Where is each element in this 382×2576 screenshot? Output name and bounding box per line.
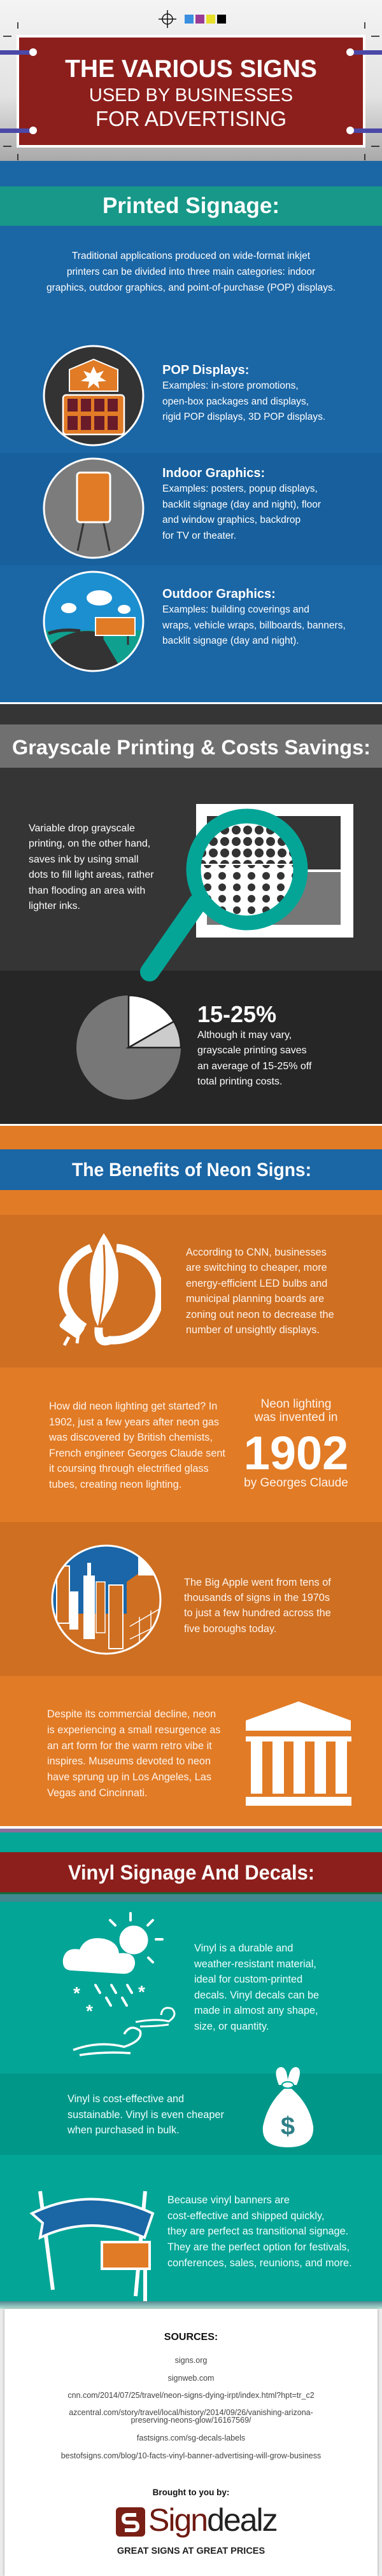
text: CNN: zoning out neon to decrease the — [186, 1309, 334, 1320]
text: big apple: five boroughs today. — [184, 1623, 276, 1635]
text: resurgence: an art form for the warm retro vibe it — [47, 1740, 212, 1752]
panel: sources: fastsigns.com/sg-decals-labels — [137, 2434, 245, 2442]
text: indoor graphics: Indoor Graphics: — [162, 466, 265, 480]
text: CNN: number of unsightly displays. — [186, 1324, 320, 1336]
panel: sources — [4, 2309, 378, 2576]
stat: 15-25%: an average of 15-25% off — [197, 1061, 311, 1072]
text: history: 1902, just a few years after neon gas — [49, 1416, 219, 1428]
text: cost-effective: when purchased in bulk. — [67, 2124, 180, 2136]
stat: 15-25%: grayscale printing saves — [197, 1045, 307, 1056]
text: resurgence: inspires. Museums devoted to neon — [47, 1755, 211, 1767]
text: indoor graphics: Examples: posters, popup displays, — [162, 483, 318, 494]
panel: neon — [0, 1124, 382, 1826]
text: variable drop: lighter inks. — [29, 901, 80, 911]
heading: vinyl — [0, 1852, 382, 1894]
text: POP displays: POP Displays: — [162, 363, 249, 377]
panel: sources: signweb.com — [168, 2374, 214, 2383]
panel: sources: azcentral.com/story/travel/local/history/2014/09/26/vanishing-arizona- — [69, 2408, 313, 2417]
text: history — [49, 1401, 225, 1490]
text: durable — [194, 1942, 319, 2032]
text: banners: They are the perfect option for festivals, — [167, 2241, 350, 2253]
text: banners — [167, 2194, 352, 2269]
text: banners: conferences, sales, reunions, and more. — [167, 2257, 352, 2269]
icon: banner arch — [29, 2191, 154, 2301]
print marks — [3, 10, 379, 160]
pie chart — [76, 995, 181, 1100]
text: cost-effective: Vinyl is cost-effective and — [67, 2093, 184, 2105]
icon: money bag — [262, 2067, 313, 2147]
text: durable: Vinyl is a durable and — [194, 1942, 293, 1954]
text: resurgence: is experiencing a small resurgence as — [47, 1724, 220, 1736]
text: outdoor graphics: Examples: building coverings and — [162, 604, 309, 615]
header background — [0, 0, 382, 161]
panel: sources: preserving-neons-glow/16167569/ — [131, 2416, 251, 2425]
icon: indoor graphics — [43, 458, 144, 558]
text: history: How did neon lighting get started? In — [49, 1401, 217, 1412]
stat: 15-25% — [197, 1001, 312, 1087]
text: CNN: are switching to cheaper, more — [186, 1262, 327, 1273]
text: variable drop — [29, 823, 154, 911]
text: history: French engineer Georges Claude sent — [49, 1448, 225, 1459]
title banner: FOR ADVERTISING — [96, 107, 286, 130]
panel: sources: bestofsigns.com/blog/10-facts-vinyl-banner-advertising-will-grow-business — [61, 2451, 321, 2460]
text: durable: made in almost any shape, — [194, 2005, 318, 2016]
divider — [0, 2301, 382, 2309]
heading: vinyl: Vinyl Signage And Decals: — [68, 1861, 315, 1884]
text: durable: weather-resistant material, — [194, 1958, 316, 1970]
brought to you by: Brought to you by: — [153, 2488, 229, 2497]
panel: sources: cnn.com/2014/07/25/travel/neon-signs-dying-irpt/index.html?hpt=tr_c2 — [67, 2391, 315, 2400]
text: cost-effective: sustainable. Vinyl is even cheaper — [67, 2109, 224, 2121]
text: indoor graphics: backlit signage (day and night), floor — [162, 499, 321, 510]
text: big apple — [184, 1577, 331, 1635]
text: POP displays: Examples: in-store promotions, — [162, 380, 299, 391]
icon: weather — [62, 1912, 176, 2056]
text: CNN — [186, 1247, 334, 1336]
text: CNN: According to CNN, businesses — [186, 1247, 327, 1258]
stat: 1902: was invented in — [255, 1411, 337, 1424]
heading: printed signage: Printed Signage: — [103, 193, 279, 218]
intro text: printers can be divided into three main categories: indoor — [67, 267, 315, 277]
title banner: USED BY BUSINESSES — [89, 85, 293, 106]
text: big apple: The Big Apple went from tens of — [184, 1577, 331, 1588]
text: indoor graphics: for TV or theater. — [162, 530, 236, 541]
intro text — [46, 251, 336, 293]
text: history: it coursing through electrified glass — [49, 1463, 209, 1474]
heading: grayscale: Grayscale Printing & Costs Savings: — [12, 736, 371, 759]
icon: money bag: $ — [281, 2112, 295, 2140]
divider stripes — [0, 1826, 382, 1832]
text: outdoor graphics: backlit signage (day and night). — [162, 635, 299, 646]
text: big apple: thousands of signs in the 1970s — [184, 1592, 330, 1603]
text: CNN: energy-efficient LED bulbs and — [186, 1278, 327, 1289]
stat: 15-25%: 15-25% — [197, 1001, 276, 1027]
title banner — [17, 35, 365, 148]
panel: grayscale printing — [0, 702, 382, 1124]
stat: 15-25%: Although it may vary, — [197, 1030, 292, 1041]
text: POP displays: rigid POP displays, 3D POP displays. — [162, 412, 325, 422]
text: resurgence: Despite its commercial decline, neon — [47, 1708, 216, 1720]
icon: museum — [246, 1701, 351, 1806]
icon: city — [51, 1544, 162, 1655]
text: durable: decals. Vinyl decals can be — [194, 1990, 319, 2001]
text: banners: Because vinyl banners are — [167, 2194, 290, 2206]
text: cost-effective — [67, 2093, 224, 2136]
text: variable drop: printing, on the other hand, — [29, 838, 150, 849]
text: banners: they are perfect as transitional signage. — [167, 2226, 348, 2237]
panel: vinyl — [0, 1894, 382, 2301]
text: variable drop: than flooding an area with — [29, 885, 145, 896]
text: resurgence — [47, 1708, 220, 1799]
text: variable drop: Variable drop grayscale — [29, 823, 135, 834]
stat: 1902: by Georges Claude — [244, 1476, 348, 1490]
text: POP displays — [162, 363, 325, 422]
heading: grayscale — [0, 724, 382, 768]
stat: 1902: Neon lighting — [261, 1397, 331, 1411]
text: durable: ideal for custom-printed — [194, 1974, 302, 1985]
text: history: was discovered by British chemists, — [49, 1432, 213, 1443]
panel: printed signage — [0, 161, 382, 702]
text: variable drop: saves ink by using small — [29, 854, 139, 865]
title banner: THE VARIOUS SIGNS — [65, 55, 317, 83]
text: durable: size, or quantity. — [194, 2021, 269, 2032]
tagline: GREAT SIGNS AT GREAT PRICES — [117, 2546, 265, 2556]
text: indoor graphics — [162, 466, 321, 541]
panel: sources: signs.org — [175, 2356, 207, 2365]
icon: magnifier over halftone — [140, 804, 353, 981]
icon: POP display — [43, 345, 144, 447]
heading: printed signage — [0, 186, 382, 226]
text: outdoor graphics: wraps, vehicle wraps, billboards, banners, — [162, 620, 346, 631]
intro text: graphics, outdoor graphics, and point-of-purchase (POP) displays. — [46, 282, 336, 293]
logo: signdealz: Signdealz — [148, 2502, 277, 2538]
text: big apple: to just a few hundred across the — [184, 1607, 331, 1619]
icon: weather: * — [86, 2001, 93, 2021]
icon: outdoor graphics — [43, 571, 144, 672]
text: variable drop: dots to fill light areas, rather — [29, 869, 154, 880]
icon: eco plug — [59, 1233, 161, 1346]
text: resurgence: Vegas and Cincinnati. — [47, 1787, 148, 1799]
text: outdoor graphics: Outdoor Graphics: — [162, 587, 276, 601]
heading: neon: The Benefits of Neon Signs: — [72, 1160, 311, 1181]
intro text: Traditional applications produced on wide-format inkjet — [72, 251, 310, 261]
banner hangers — [0, 48, 382, 134]
text: outdoor graphics — [162, 587, 346, 646]
stat: 1902 — [244, 1397, 348, 1490]
text: CNN: municipal planning boards are — [186, 1293, 324, 1305]
sources heading: SOURCES: — [164, 2332, 218, 2343]
text: banners: cost-effective and shipped quickly, — [167, 2210, 324, 2222]
text: history: tubes, creating neon lighting. — [49, 1479, 181, 1490]
stat: 1902: 1902 — [244, 1427, 348, 1479]
text: resurgence: have sprung up in Los Angeles, Las — [47, 1771, 211, 1783]
stat: 15-25%: total printing costs. — [197, 1076, 282, 1087]
text: indoor graphics: and window graphics, backdrop — [162, 515, 301, 525]
icon: weather: * — [138, 1982, 145, 2002]
icon: weather: * — [73, 1983, 80, 2003]
heading: neon — [0, 1149, 382, 1190]
text: POP displays: open-box packages and displays, — [162, 396, 309, 407]
sources list — [61, 2356, 321, 2460]
